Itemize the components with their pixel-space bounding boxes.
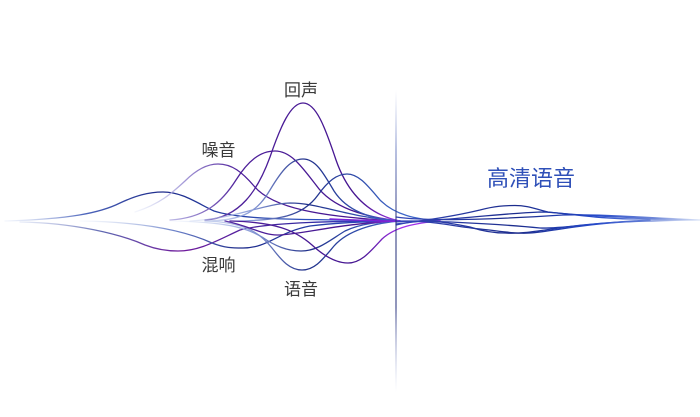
chart: clean waveforms after processing [396, 206, 700, 233]
label: noise: 噪音 [202, 141, 236, 160]
label: echo: 回声 [284, 81, 318, 100]
divider: vertical line [396, 90, 397, 392]
chart: mixed waveforms before processing [5, 103, 440, 270]
label: speech: 语音 [284, 280, 318, 299]
heading: HD voice: 高清语音 [487, 166, 575, 191]
label: reverberation: 混响 [202, 256, 236, 275]
